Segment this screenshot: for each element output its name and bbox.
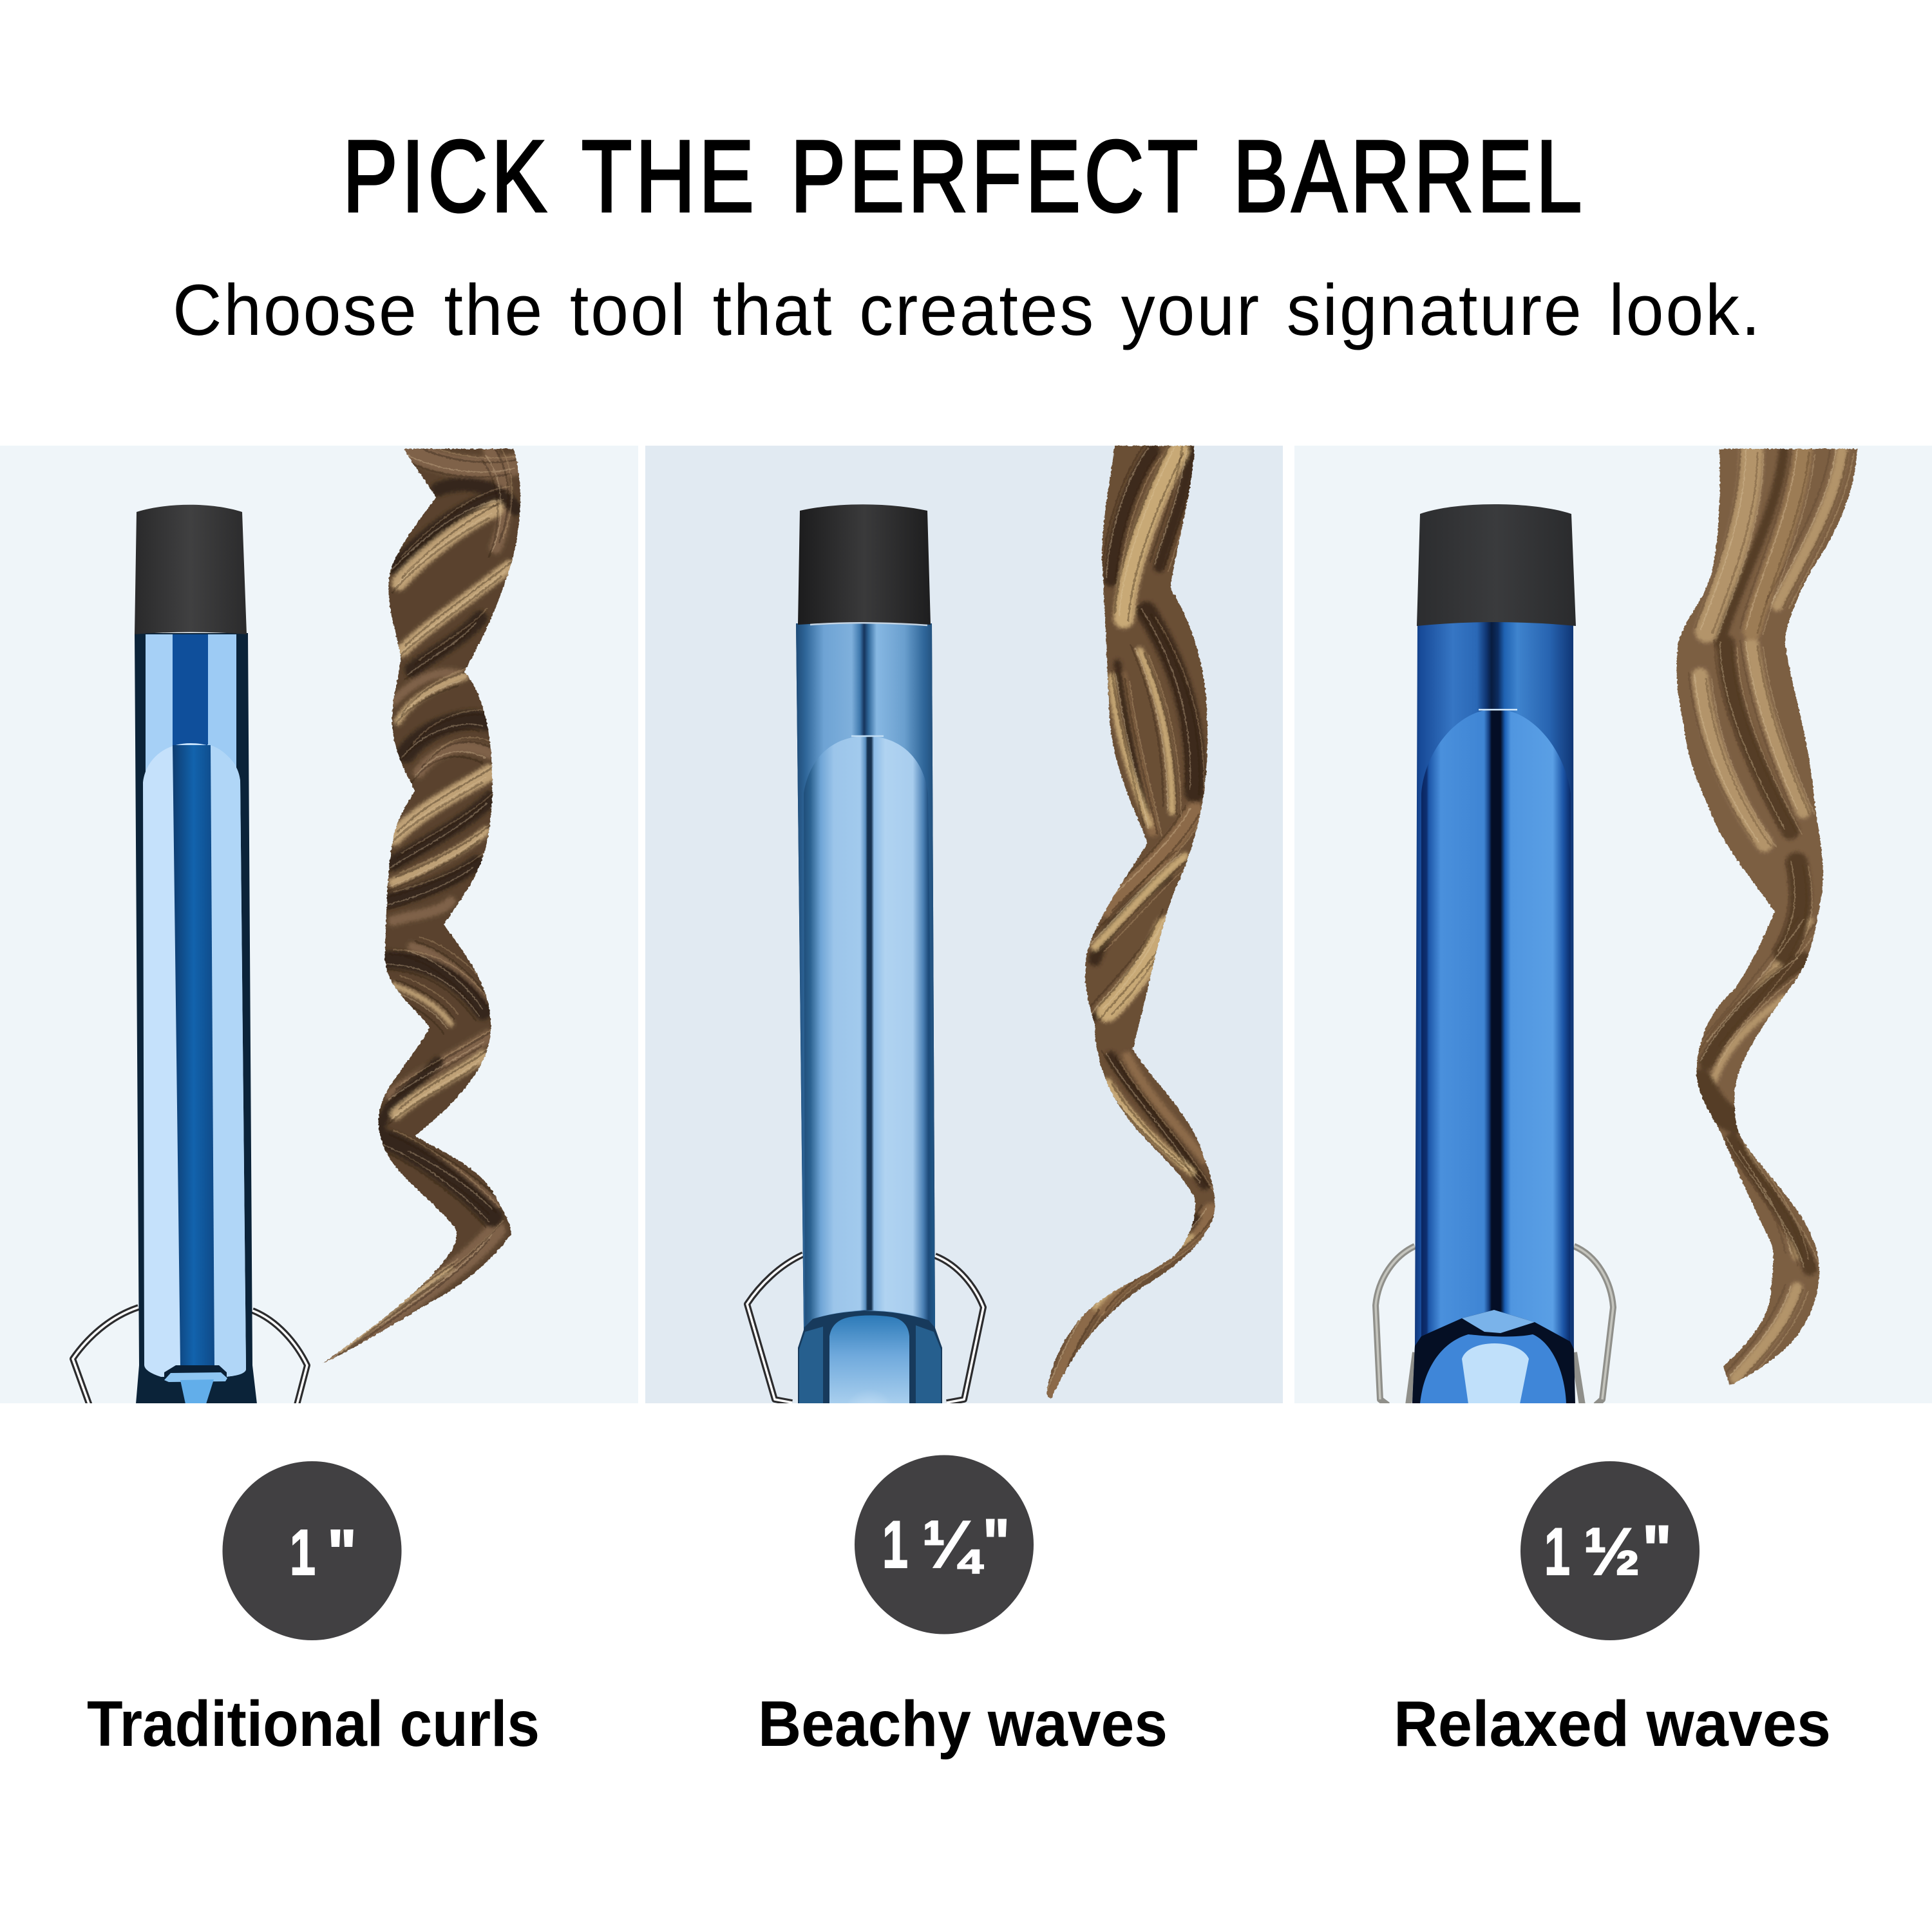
size badge: 1 1/4 inch: "	[983, 1506, 1010, 1580]
size badge: 1 inch	[223, 1461, 402, 1640]
title: PICK THE PERFECT BARREL	[343, 120, 1586, 233]
curling iron: 1 inch	[73, 505, 307, 1407]
hair curl 1	[316, 441, 528, 1372]
panel: 1 1/2 inch barrel	[1294, 444, 1932, 1405]
size badge: 1 1/2 inch: "	[1642, 1512, 1672, 1587]
panel background 3	[1294, 446, 1932, 1403]
subtitle: Choose the tool that creates your signature look.	[173, 270, 1762, 350]
panel background 2	[645, 446, 1283, 1403]
hair curl 3	[1668, 444, 1868, 1391]
panel: 1 inch barrel	[0, 441, 638, 1407]
panel: 1 1/4 inch barrel	[645, 444, 1283, 1455]
label: beachy waves: Beachy waves	[758, 1688, 1168, 1760]
size badge: 1 1/2 inch: ½	[1584, 1515, 1640, 1589]
size badge: 1 1/2 inch: 1	[1544, 1515, 1570, 1589]
hair curl 2	[1046, 446, 1215, 1399]
size badge: 1 inch: "	[327, 1517, 357, 1589]
curling iron: 1 1/2 inch	[1376, 504, 1613, 1405]
size badge: 1 1/4 inch: ¼	[922, 1508, 983, 1582]
size badge: 1 1/4 inch	[855, 1455, 1034, 1634]
panel background 1	[0, 446, 638, 1403]
size badge: 1 1/2 inch	[1520, 1461, 1700, 1640]
label: relaxed waves: Relaxed waves	[1394, 1688, 1831, 1760]
wire stand 1	[73, 1307, 307, 1407]
size badge: 1 inch: 1	[290, 1517, 316, 1589]
size badge: 1 1/4 inch: 1	[882, 1508, 908, 1582]
wire stand 3	[1376, 1246, 1613, 1405]
wire stand 2	[747, 1255, 983, 1403]
label: traditional curls: Traditional curls	[87, 1688, 540, 1760]
curling iron: 1 1/4 inch	[747, 504, 983, 1455]
